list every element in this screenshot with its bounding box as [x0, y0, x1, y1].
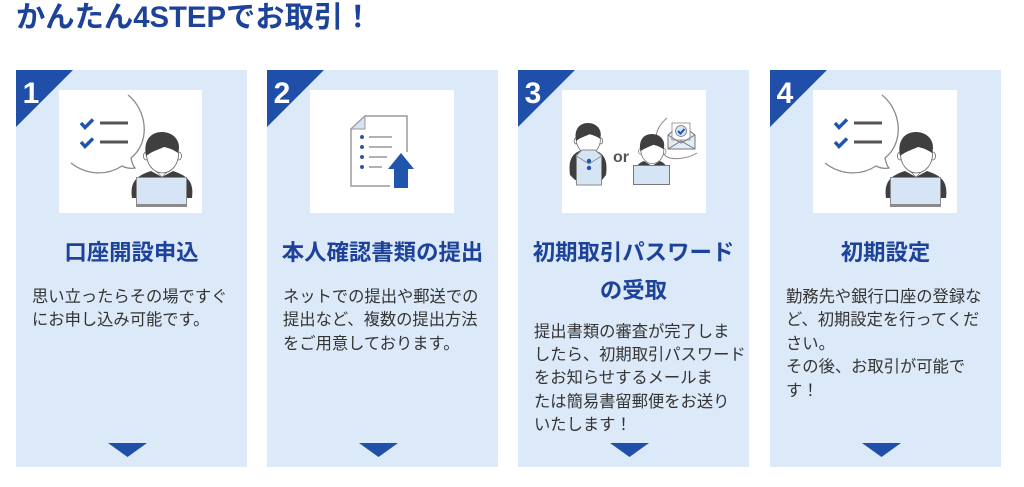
- description: す！: [786, 382, 819, 400]
- heading: 初期設定: [841, 240, 930, 265]
- description: その後、お取引が可能で: [786, 358, 965, 376]
- description: いたします！: [534, 416, 632, 434]
- description: をご用意しております。: [283, 335, 460, 353]
- description: ネットでの提出や郵送での: [283, 288, 478, 306]
- heading: 本人確認書類の提出: [282, 240, 483, 265]
- step 3 number badge: 3: [525, 77, 541, 110]
- description: 勤務先や銀行口座の登録な: [786, 288, 981, 306]
- step 2 number badge: [267, 70, 324, 127]
- step 3 number badge: [518, 70, 575, 127]
- description: [786, 288, 981, 400]
- arrow: [359, 443, 398, 457]
- description: [283, 288, 478, 353]
- description: 提出書類の審査が完了しま: [534, 322, 729, 340]
- step 2 number badge: 2: [274, 77, 290, 110]
- title: かんたん4STEPでお取引！: [16, 1, 372, 34]
- step 4 number badge: 4: [777, 77, 793, 110]
- description: にお申し込み可能です。: [32, 311, 209, 329]
- description: 思い立ったらその場ですぐ: [32, 288, 227, 306]
- description: したら、初期取引パスワード: [534, 346, 746, 364]
- heading: 初期取引パスワード: [533, 240, 734, 265]
- icon: person with checklist speech bubble: [59, 90, 202, 213]
- description: をお知らせするメールま: [534, 369, 713, 387]
- panel: step 1: [16, 70, 247, 467]
- heading: の受取: [600, 278, 667, 303]
- arrow: [862, 443, 901, 457]
- panel: step 4: [770, 70, 1001, 467]
- description: たは簡易書留郵便をお送り: [534, 393, 729, 411]
- arrow: [610, 443, 649, 457]
- step 1 number badge: 1: [23, 77, 39, 110]
- icon: person with checklist speech bubble: [813, 90, 957, 213]
- description: さい。: [786, 335, 835, 353]
- description: ど、初期設定を行ってくだ: [786, 311, 979, 329]
- panel: step 2: [267, 70, 498, 467]
- description: [32, 288, 227, 329]
- icon: person with mail or envelope: or: [613, 149, 629, 166]
- icon: person with mail or envelope: [562, 90, 706, 213]
- heading: 口座開設申込: [64, 240, 199, 265]
- icon: document upload: [310, 90, 454, 213]
- arrow: [108, 443, 147, 457]
- description: 提出など、複数の提出方法: [283, 311, 478, 329]
- step 4 number badge: [770, 70, 827, 127]
- description: [534, 322, 746, 434]
- step 1 number badge: [16, 70, 73, 127]
- heading: [533, 240, 734, 303]
- panel: step 3: [518, 70, 749, 467]
